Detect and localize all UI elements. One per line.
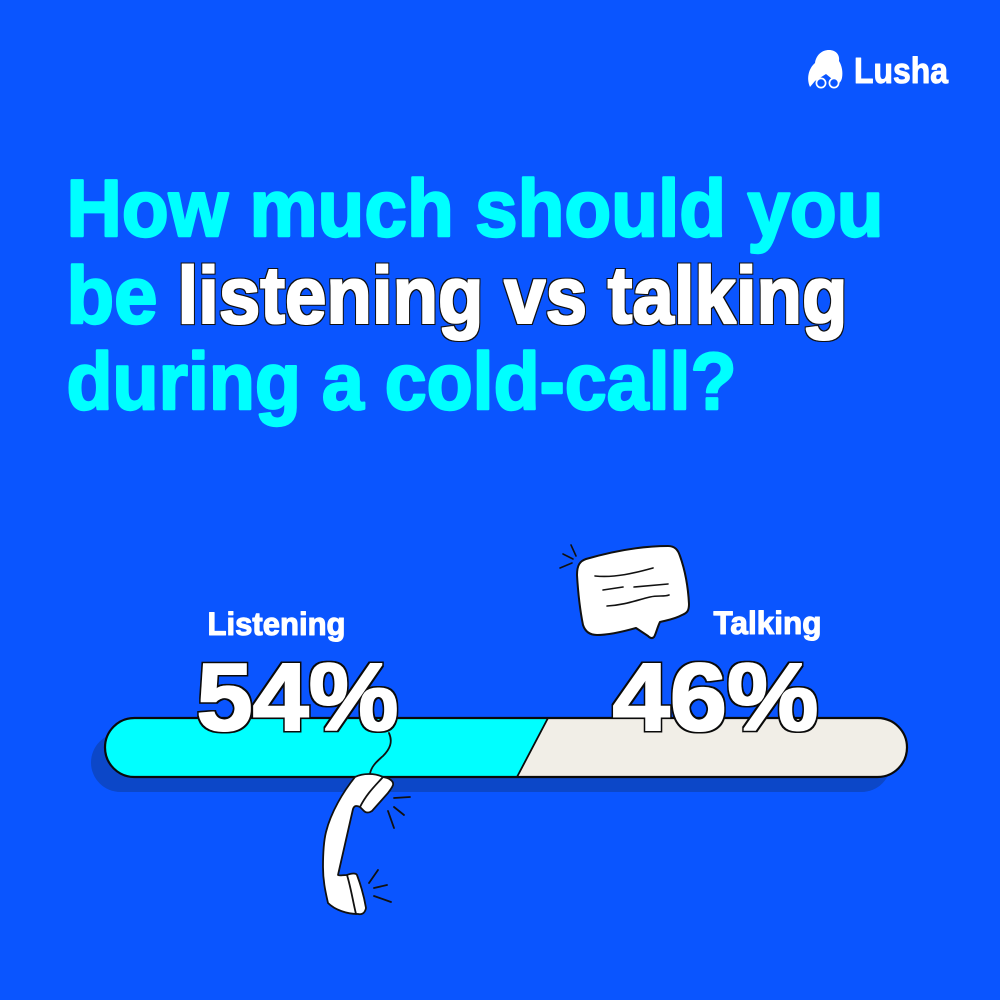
handset body: [323, 774, 393, 914]
bar divider: [517, 718, 548, 777]
logo wordmark: Lusha: [854, 50, 949, 91]
percentage: 46%: 46%: [612, 644, 818, 751]
phone cord: [370, 733, 391, 774]
icon: logo head with glasses: [808, 50, 842, 88]
logo: Lusha: [808, 50, 949, 91]
bubble outline: [577, 546, 689, 638]
bubble spark lines: [560, 545, 576, 568]
progress bar: [105, 718, 907, 777]
handset detail lines: [347, 777, 383, 914]
label: Listening: Listening: [208, 606, 346, 642]
bar segment: talking 46%: [510, 718, 907, 777]
label: Talking: Talking: [714, 605, 822, 641]
icon: speech bubble: [560, 545, 689, 638]
percentage: 54%: 54%: [196, 644, 398, 751]
bar outline: [105, 718, 907, 777]
title: [66, 164, 884, 427]
title line 2: be: be: [66, 251, 158, 341]
title line 2: highlighted words: listening vs talking: [178, 251, 848, 341]
bar segment: listening 54%: [105, 718, 548, 777]
bubble text lines: [595, 568, 669, 606]
icon: telephone handset: [323, 733, 410, 914]
bar shadow: [91, 733, 891, 792]
title line 1: How much should you: [66, 164, 884, 254]
title line 3: during a cold-call?: [66, 337, 736, 427]
vibration lines: [369, 797, 410, 902]
